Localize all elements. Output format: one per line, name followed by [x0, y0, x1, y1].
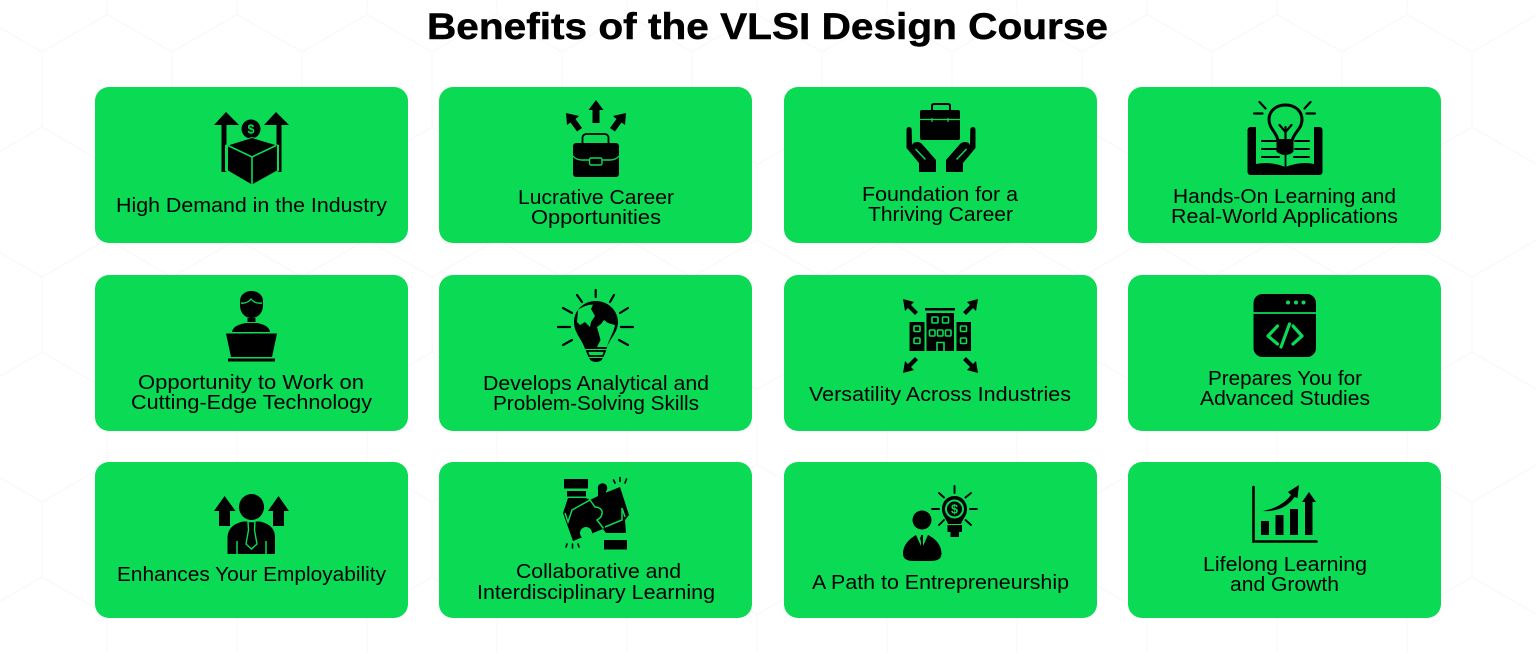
icon: box with coin and arrows	[214, 112, 289, 186]
panel: Hands-On Learning and Real-World Applications	[1128, 87, 1441, 243]
label: Collaborative and	[516, 560, 681, 583]
label: and Growth	[1230, 573, 1339, 596]
panel: Develops Analytical and Problem-Solving Skills	[439, 275, 752, 431]
icon: person with money lightbulb	[903, 486, 977, 561]
panel: Enhances Your Employability	[95, 462, 408, 618]
label: Hands-On Learning and	[1173, 185, 1396, 208]
label	[1171, 185, 1398, 228]
label: Foundation for a	[862, 183, 1019, 206]
panel: Versatility Across Industries	[784, 275, 1097, 431]
label: Interdisciplinary Learning	[477, 581, 715, 604]
label: Opportunity to Work on	[138, 371, 364, 394]
icon: person at laptop	[226, 291, 277, 362]
label	[1200, 367, 1370, 410]
panel: Collaborative and Interdisciplinary Learning	[439, 462, 752, 618]
label: Thriving Career	[868, 203, 1013, 226]
label: High Demand in the Industry	[116, 194, 388, 217]
panel: A Path to Entrepreneurship	[784, 462, 1097, 618]
icon: hands joining puzzle pieces	[563, 478, 629, 550]
icon: briefcase with three arrows	[566, 100, 626, 177]
label: A Path to Entrepreneurship	[812, 571, 1069, 594]
label	[483, 372, 709, 415]
panel: Opportunity to Work on Cutting-Edge Technology	[95, 275, 408, 431]
icon: code window	[1254, 294, 1316, 357]
label	[131, 371, 373, 414]
icon: person with money lightbulb: $	[951, 502, 958, 516]
panel: High Demand in the Industry	[95, 87, 408, 243]
icon: hands holding briefcase	[906, 104, 976, 172]
icon: lightbulb with puzzle pieces	[558, 290, 633, 362]
label: Develops Analytical and	[483, 372, 709, 395]
icon: box with coin and arrows: $	[248, 122, 255, 136]
icon: book with lightbulb	[1248, 102, 1322, 175]
label: Problem-Solving Skills	[493, 392, 699, 415]
icon: buildings with four arrows	[903, 299, 978, 373]
title: Benefits of the VLSI Design Course	[427, 6, 1108, 47]
label: Opportunities	[531, 206, 661, 229]
panel: Lifelong Learning and Growth	[1128, 462, 1441, 618]
label: Cutting-Edge Technology	[131, 391, 373, 414]
label: Prepares You for	[1208, 367, 1362, 390]
icon: professional with up arrows	[214, 494, 289, 554]
label	[862, 183, 1019, 226]
icon: growth bar chart	[1254, 485, 1316, 542]
label: Versatility Across Industries	[809, 383, 1071, 406]
label	[1203, 553, 1367, 596]
label: Lucrative Career	[518, 186, 674, 209]
panel: Lucrative Career Opportunities	[439, 87, 752, 243]
label: Real-World Applications	[1171, 205, 1398, 228]
panel: Prepares You for Advanced Studies	[1128, 275, 1441, 431]
label: Enhances Your Employability	[117, 563, 387, 586]
label	[477, 560, 715, 604]
label	[518, 186, 674, 229]
panel: Foundation for a Thriving Career	[784, 87, 1097, 243]
label: Lifelong Learning	[1203, 553, 1367, 576]
label: Advanced Studies	[1200, 387, 1370, 410]
